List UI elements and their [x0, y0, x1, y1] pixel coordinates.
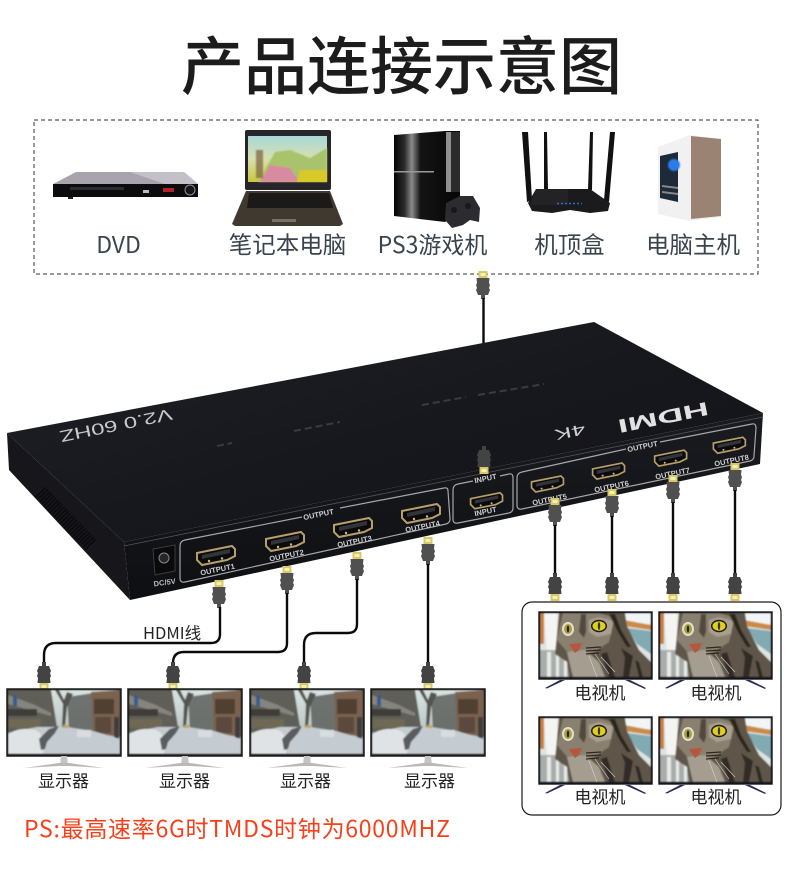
side vents: [40, 492, 92, 546]
icon: router: [522, 132, 615, 213]
port labels: OUTPUT8: [713, 453, 750, 468]
TV 3: [539, 717, 652, 808]
ports: [197, 546, 235, 565]
cable: output 8: [728, 463, 742, 601]
label: PS3: PS3游戏机: [378, 226, 487, 260]
port labels: OUTPUT7: [654, 466, 691, 481]
icon: laptop: [232, 130, 343, 226]
text: HDMI logo: HDMI: [616, 397, 710, 436]
port labels: [199, 439, 750, 577]
port labels: INPUT: [474, 472, 498, 485]
left side: [7, 433, 130, 600]
cable: output 4: [421, 537, 435, 690]
label: laptop: 笔记本电脑: [229, 226, 346, 260]
monitor 1: 显示器: [38, 767, 89, 792]
dashed frame: [34, 120, 758, 274]
label: set-top box: 机顶盒: [534, 226, 605, 260]
panel: source devices: [34, 120, 758, 274]
label: PC host: 电脑主机: [646, 226, 740, 260]
panel: HDMI splitter: [7, 322, 763, 600]
panel: monitors: [7, 689, 485, 792]
panel: televisions: [522, 602, 781, 815]
power jack: DC/5V: [153, 577, 176, 589]
group frame: input: [453, 474, 513, 523]
front face: [124, 413, 763, 600]
cable: output 7: [666, 475, 680, 601]
cable: output 3: [297, 552, 364, 690]
text: version: V2.0 60HZ: [58, 405, 174, 444]
monitor 4: 显示器: [404, 767, 455, 792]
text: 4K: 4K: [553, 420, 587, 443]
port labels: OUTPUT3: [336, 534, 373, 549]
monitor 4: [371, 689, 485, 792]
label: DVD: DVD: [96, 226, 141, 260]
title: 产品连接示意图: [181, 17, 622, 108]
port labels: OUTPUT6: [593, 479, 630, 494]
icon: PC tower: [658, 135, 721, 221]
TV 2: 电视机: [690, 679, 742, 704]
cable: output 2: [166, 566, 294, 690]
group frame: outputs 5-8: [517, 424, 756, 509]
footnote: PS:最高速率6G时TMDS时钟为6000MHZ: [24, 810, 450, 844]
TV 4: [659, 717, 772, 808]
port labels: OUTPUT5: [531, 492, 568, 507]
monitor 2: [128, 689, 242, 792]
TV 3: 电视机: [574, 783, 626, 808]
power jack: [153, 545, 176, 589]
monitor 1: [7, 689, 121, 792]
top surface: [7, 322, 763, 542]
input connector on switch: [477, 446, 491, 474]
icon: PS3 console: [394, 131, 480, 228]
icon: DVD player: [53, 172, 198, 199]
port labels: INPUT: [474, 505, 498, 518]
cable: output 6: [605, 489, 619, 601]
port labels: OUTPUT2: [268, 548, 305, 563]
cable: input source to switch: [476, 271, 490, 345]
cable label: HDMI线: [143, 620, 201, 644]
port labels: OUTPUT4: [404, 518, 441, 534]
port labels: OUTPUT: [626, 439, 659, 454]
monitor 3: [250, 689, 364, 792]
port labels: OUTPUT1: [199, 562, 236, 577]
monitor 2: 显示器: [159, 767, 210, 792]
monitor 3: 显示器: [280, 767, 331, 792]
cable: output 5: [548, 498, 562, 601]
cable: output 1: [37, 580, 226, 690]
TV 4: 电视机: [690, 783, 742, 808]
TV 2: [659, 612, 772, 704]
TV 1: [539, 612, 652, 704]
port labels: OUTPUT: [302, 507, 335, 522]
TV 1: 电视机: [574, 679, 626, 704]
group frame: outputs 1-4: [180, 488, 450, 582]
